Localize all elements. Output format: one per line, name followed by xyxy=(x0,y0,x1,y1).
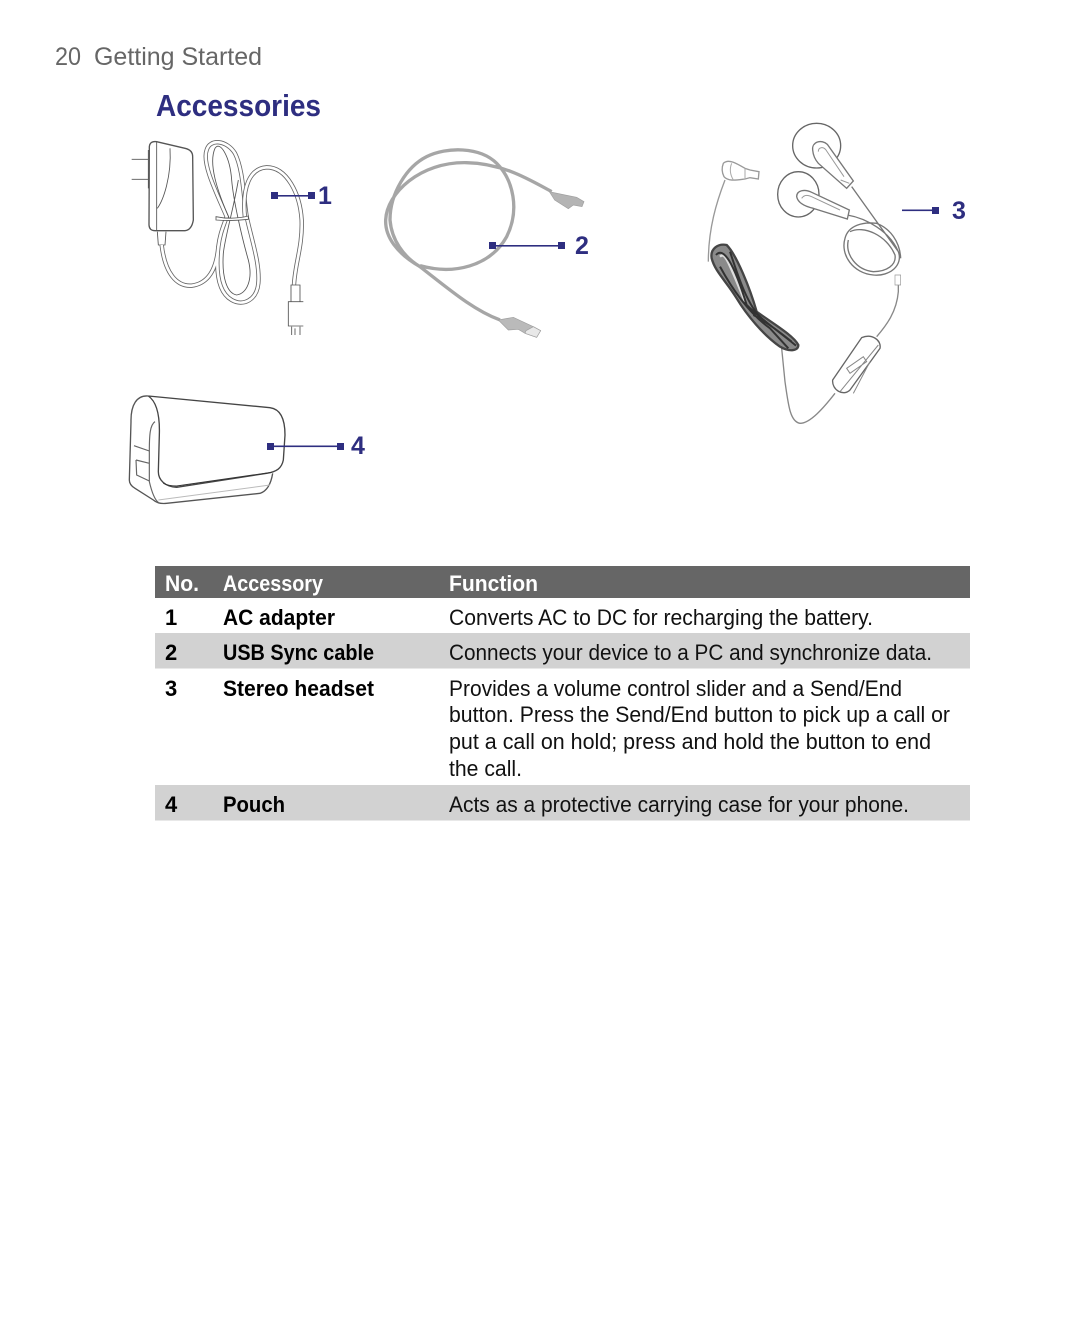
leader line 1 xyxy=(271,192,315,199)
row 2: USB Sync cable: 2 xyxy=(165,640,177,665)
row 1: AC adapter: AC adapter xyxy=(223,605,335,630)
volume slider xyxy=(833,336,880,393)
table header row xyxy=(155,566,970,598)
row 3: Stereo headset: button. Press the Send/End button to pick up a call or xyxy=(449,702,950,727)
number 3: 3 xyxy=(952,197,966,225)
row 3: Stereo headset: the call. xyxy=(449,756,522,781)
earbud cables and loop xyxy=(844,187,901,275)
coiled cord xyxy=(711,245,798,350)
page header: 20 xyxy=(55,43,81,71)
row 3: Stereo headset: Stereo headset xyxy=(223,676,375,701)
table header row: Accessory xyxy=(223,571,324,596)
row 3: Stereo headset: Provides a volume control slider and a Send/End xyxy=(449,676,902,701)
table header row: Function xyxy=(449,571,538,596)
illustration: USB sync cable xyxy=(386,150,584,337)
row 1: AC adapter xyxy=(165,605,873,630)
number 1: 1 xyxy=(318,182,332,210)
row 2: USB Sync cable: USB Sync cable xyxy=(223,640,374,665)
plug xyxy=(708,180,725,262)
page header: Getting Started xyxy=(94,43,262,71)
row 1: AC adapter: 1 xyxy=(165,605,177,630)
illustration: pouch xyxy=(129,396,285,504)
table header row: No. xyxy=(165,571,199,596)
row 4: Pouch: Acts as a protective carrying case for your phone. xyxy=(449,792,909,817)
leader line 2 xyxy=(489,242,565,249)
illustration: stereo headset xyxy=(708,123,901,423)
row 4: Pouch: Pouch xyxy=(223,792,285,817)
row 2: USB Sync cable: Connects your device to a PC and synchronize data. xyxy=(449,640,932,665)
row 3: Stereo headset: put a call on hold; press and hold the button to end xyxy=(449,729,931,754)
accessories table xyxy=(155,566,970,820)
number 2: 2 xyxy=(575,232,589,260)
leader line 4 xyxy=(267,443,344,450)
row 2: USB Sync cable xyxy=(155,633,970,668)
illustration: AC adapter xyxy=(132,142,303,335)
row 3: Stereo headset: 3 xyxy=(165,676,177,701)
number 4: 4 xyxy=(351,432,365,460)
row 4: Pouch xyxy=(155,785,970,820)
leader line 3 xyxy=(902,207,939,214)
title: Accessories xyxy=(156,88,321,123)
row 1: AC adapter: Converts AC to DC for recharging the battery. xyxy=(449,605,873,630)
row 3: Stereo headset xyxy=(165,676,950,781)
row 4: Pouch: 4 xyxy=(165,792,178,817)
